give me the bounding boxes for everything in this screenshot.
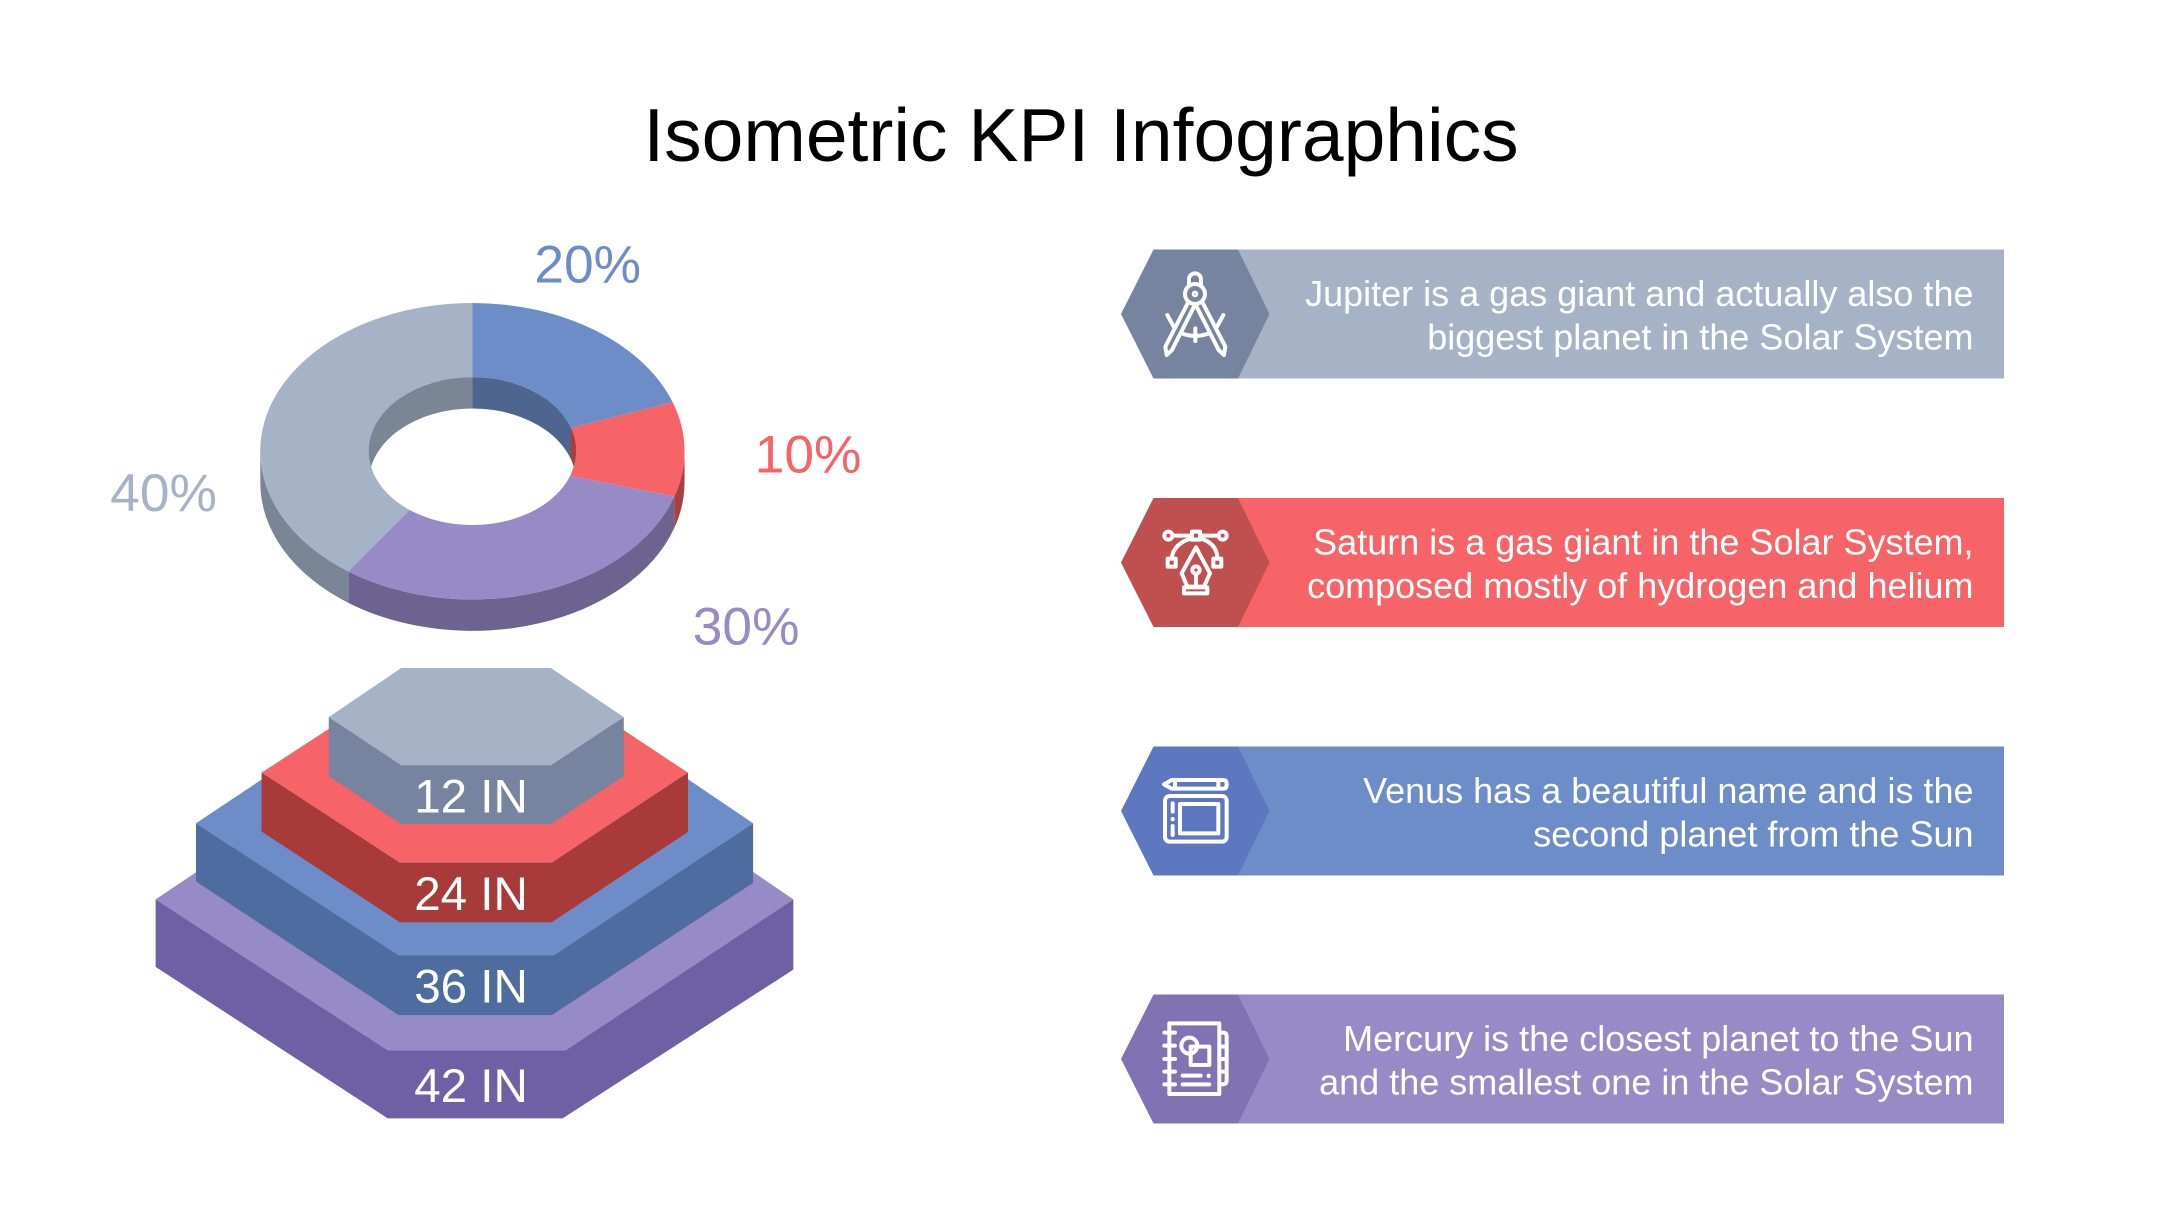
panel: Saturn bbox=[1121, 498, 2004, 627]
layer: 24 IN: 24 IN bbox=[414, 868, 528, 921]
layer: 12 IN: 12 IN bbox=[414, 771, 528, 824]
layer: 42 IN bbox=[156, 744, 793, 1118]
description: Mercury is the closest planet to the Sun bbox=[1343, 1018, 1974, 1059]
segment: 40% grey bbox=[260, 303, 472, 571]
panel: Mercury bbox=[1121, 994, 2004, 1124]
label: 30%: 30% bbox=[693, 598, 799, 657]
layer: 12 IN bbox=[329, 668, 624, 824]
bar bbox=[1200, 746, 2004, 876]
donut chart bbox=[110, 235, 861, 657]
layer: 42 IN: 42 IN bbox=[414, 1060, 528, 1113]
infographic canvas bbox=[111, 106, 2004, 1124]
description: Saturn is a gas giant in the Solar System, bbox=[1313, 522, 1974, 562]
description: and the smallest one in the Solar System bbox=[1319, 1062, 1974, 1102]
description: composed mostly of hydrogen and helium bbox=[1307, 565, 1974, 606]
segment: 30% purple bbox=[348, 476, 674, 599]
segment: 10% red bbox=[570, 402, 685, 497]
title: Isometric KPI Infographics bbox=[643, 93, 1519, 177]
stacked hexagon pyramid bbox=[156, 668, 793, 1118]
hexagon badge bbox=[1121, 994, 1270, 1124]
layer: 36 IN bbox=[196, 689, 753, 1015]
label: 40%: 40% bbox=[110, 464, 217, 523]
panel: Jupiter bbox=[1121, 250, 2004, 378]
icon: drawing tablet bbox=[1164, 780, 1227, 842]
hexagon badge bbox=[1121, 250, 1270, 378]
description: Jupiter is a gas giant and actually also the bbox=[1305, 273, 1974, 314]
bar bbox=[1200, 498, 2004, 627]
layer: 36 IN: 36 IN bbox=[414, 961, 528, 1014]
donut side wall bbox=[260, 451, 685, 631]
description: Venus has a beautiful name and is the bbox=[1363, 770, 1974, 811]
layer: 24 IN bbox=[262, 683, 688, 922]
icon: sketchbook bbox=[1164, 1023, 1227, 1094]
bar bbox=[1200, 994, 2004, 1124]
panel: Venus bbox=[1121, 746, 2004, 876]
segment: 20% blue bbox=[472, 303, 673, 428]
hexagon badge bbox=[1121, 746, 1270, 876]
label: 10%: 10% bbox=[755, 425, 861, 484]
donut inner wall and hole bbox=[368, 377, 576, 525]
description: second planet from the Sun bbox=[1533, 814, 1974, 854]
description: biggest planet in the Solar System bbox=[1427, 316, 1974, 358]
icon: pen tool bbox=[1164, 532, 1227, 593]
bar bbox=[1200, 250, 2004, 378]
icon: compass bbox=[1165, 273, 1225, 355]
hexagon badge bbox=[1121, 498, 1270, 627]
label: 20%: 20% bbox=[534, 235, 641, 294]
